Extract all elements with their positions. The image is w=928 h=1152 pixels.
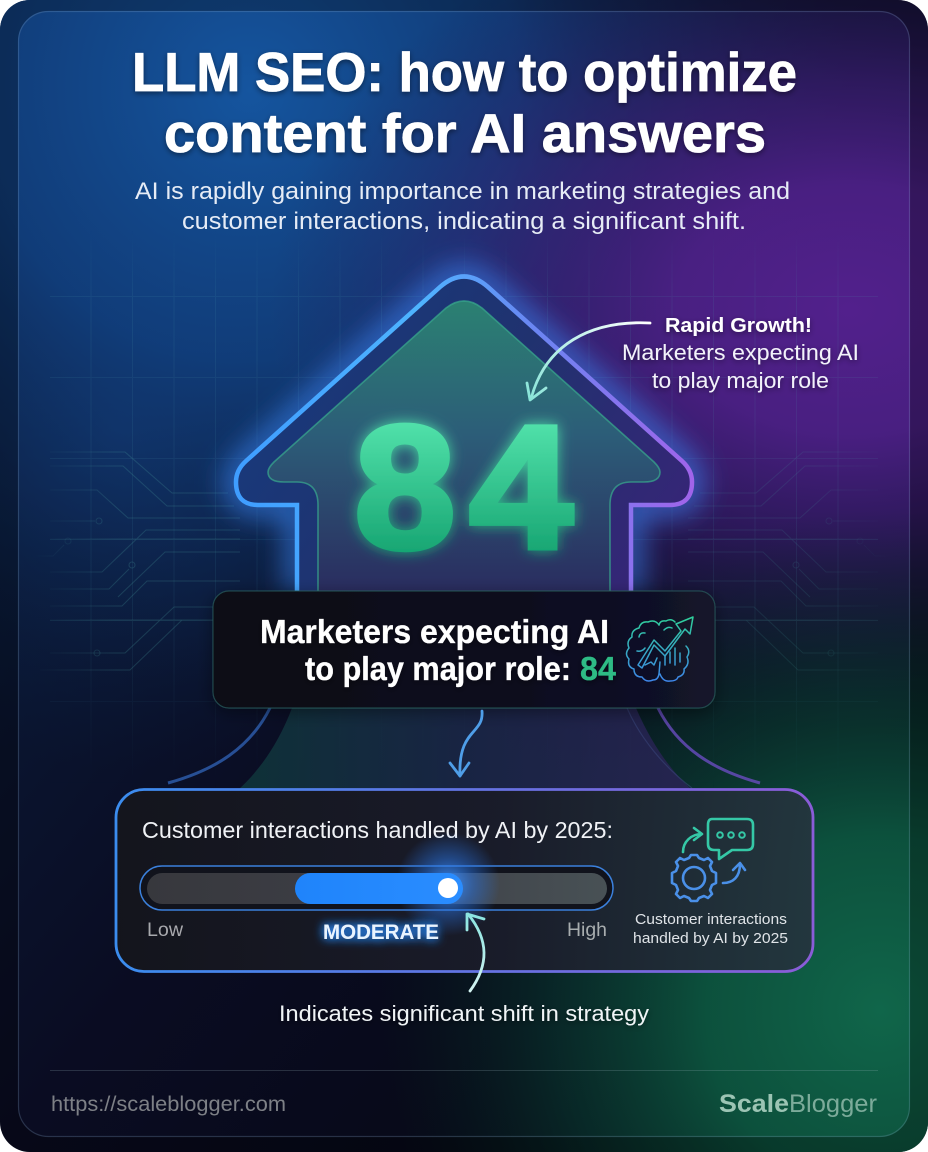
slider [140, 832, 613, 936]
slider knob [438, 878, 458, 898]
big number 84: 8 [354, 390, 456, 586]
stat text: 84 [580, 650, 617, 687]
stat text: to play major role: [305, 650, 571, 687]
footer url: https://scaleblogger.com [51, 1093, 286, 1116]
arrow: note to slider [467, 914, 484, 991]
callout: rapid growth: Marketers expecting AI [622, 340, 859, 365]
slider labels: High [567, 920, 607, 941]
icon: brain with growth arrow [626, 617, 693, 681]
house arrow outline [236, 276, 692, 592]
icon caption: handled by AI by 2025 [633, 930, 788, 947]
slider labels: MODERATE [323, 921, 439, 944]
footer brand: Blogger [789, 1090, 877, 1118]
subtitle: customer interactions, indicating a significant shift. [182, 208, 746, 235]
slider labels: Low [147, 920, 183, 941]
house inner panel [268, 301, 660, 592]
callout: rapid growth: to play major role [652, 368, 829, 393]
callout: rapid growth: Rapid Growth! [665, 315, 812, 337]
slider labels [147, 920, 607, 944]
note: Indicates significant shift in strategy [279, 1001, 649, 1026]
icon caption [633, 911, 788, 947]
subtitle [135, 178, 790, 235]
lower stem flare [168, 708, 760, 790]
grid lines [50, 271, 878, 685]
title: content for AI answers [164, 102, 766, 164]
circuit traces [20, 452, 908, 670]
panel: customer interactions [116, 790, 813, 972]
icon: gear and chat bubble [672, 819, 753, 901]
callout: rapid growth [622, 315, 859, 393]
subtitle: AI is rapidly gaining importance in marketing strategies and [135, 178, 790, 205]
big number 84: 4 [469, 390, 573, 586]
panel heading: Customer interactions handled by AI by 2025: [142, 817, 613, 843]
arrow: callout to number [527, 323, 650, 400]
stat box [213, 591, 715, 708]
arrow: box to panel [450, 711, 482, 776]
title: LLM SEO: how to optimize [132, 41, 797, 103]
big number 84 [354, 390, 573, 586]
icon caption: Customer interactions [635, 911, 787, 928]
footer brand: Scale [719, 1090, 789, 1118]
stat text: Marketers expecting AI [260, 613, 609, 650]
footer divider [50, 1070, 878, 1072]
title [132, 41, 797, 164]
footer brand [719, 1090, 877, 1118]
stat text [260, 613, 617, 687]
